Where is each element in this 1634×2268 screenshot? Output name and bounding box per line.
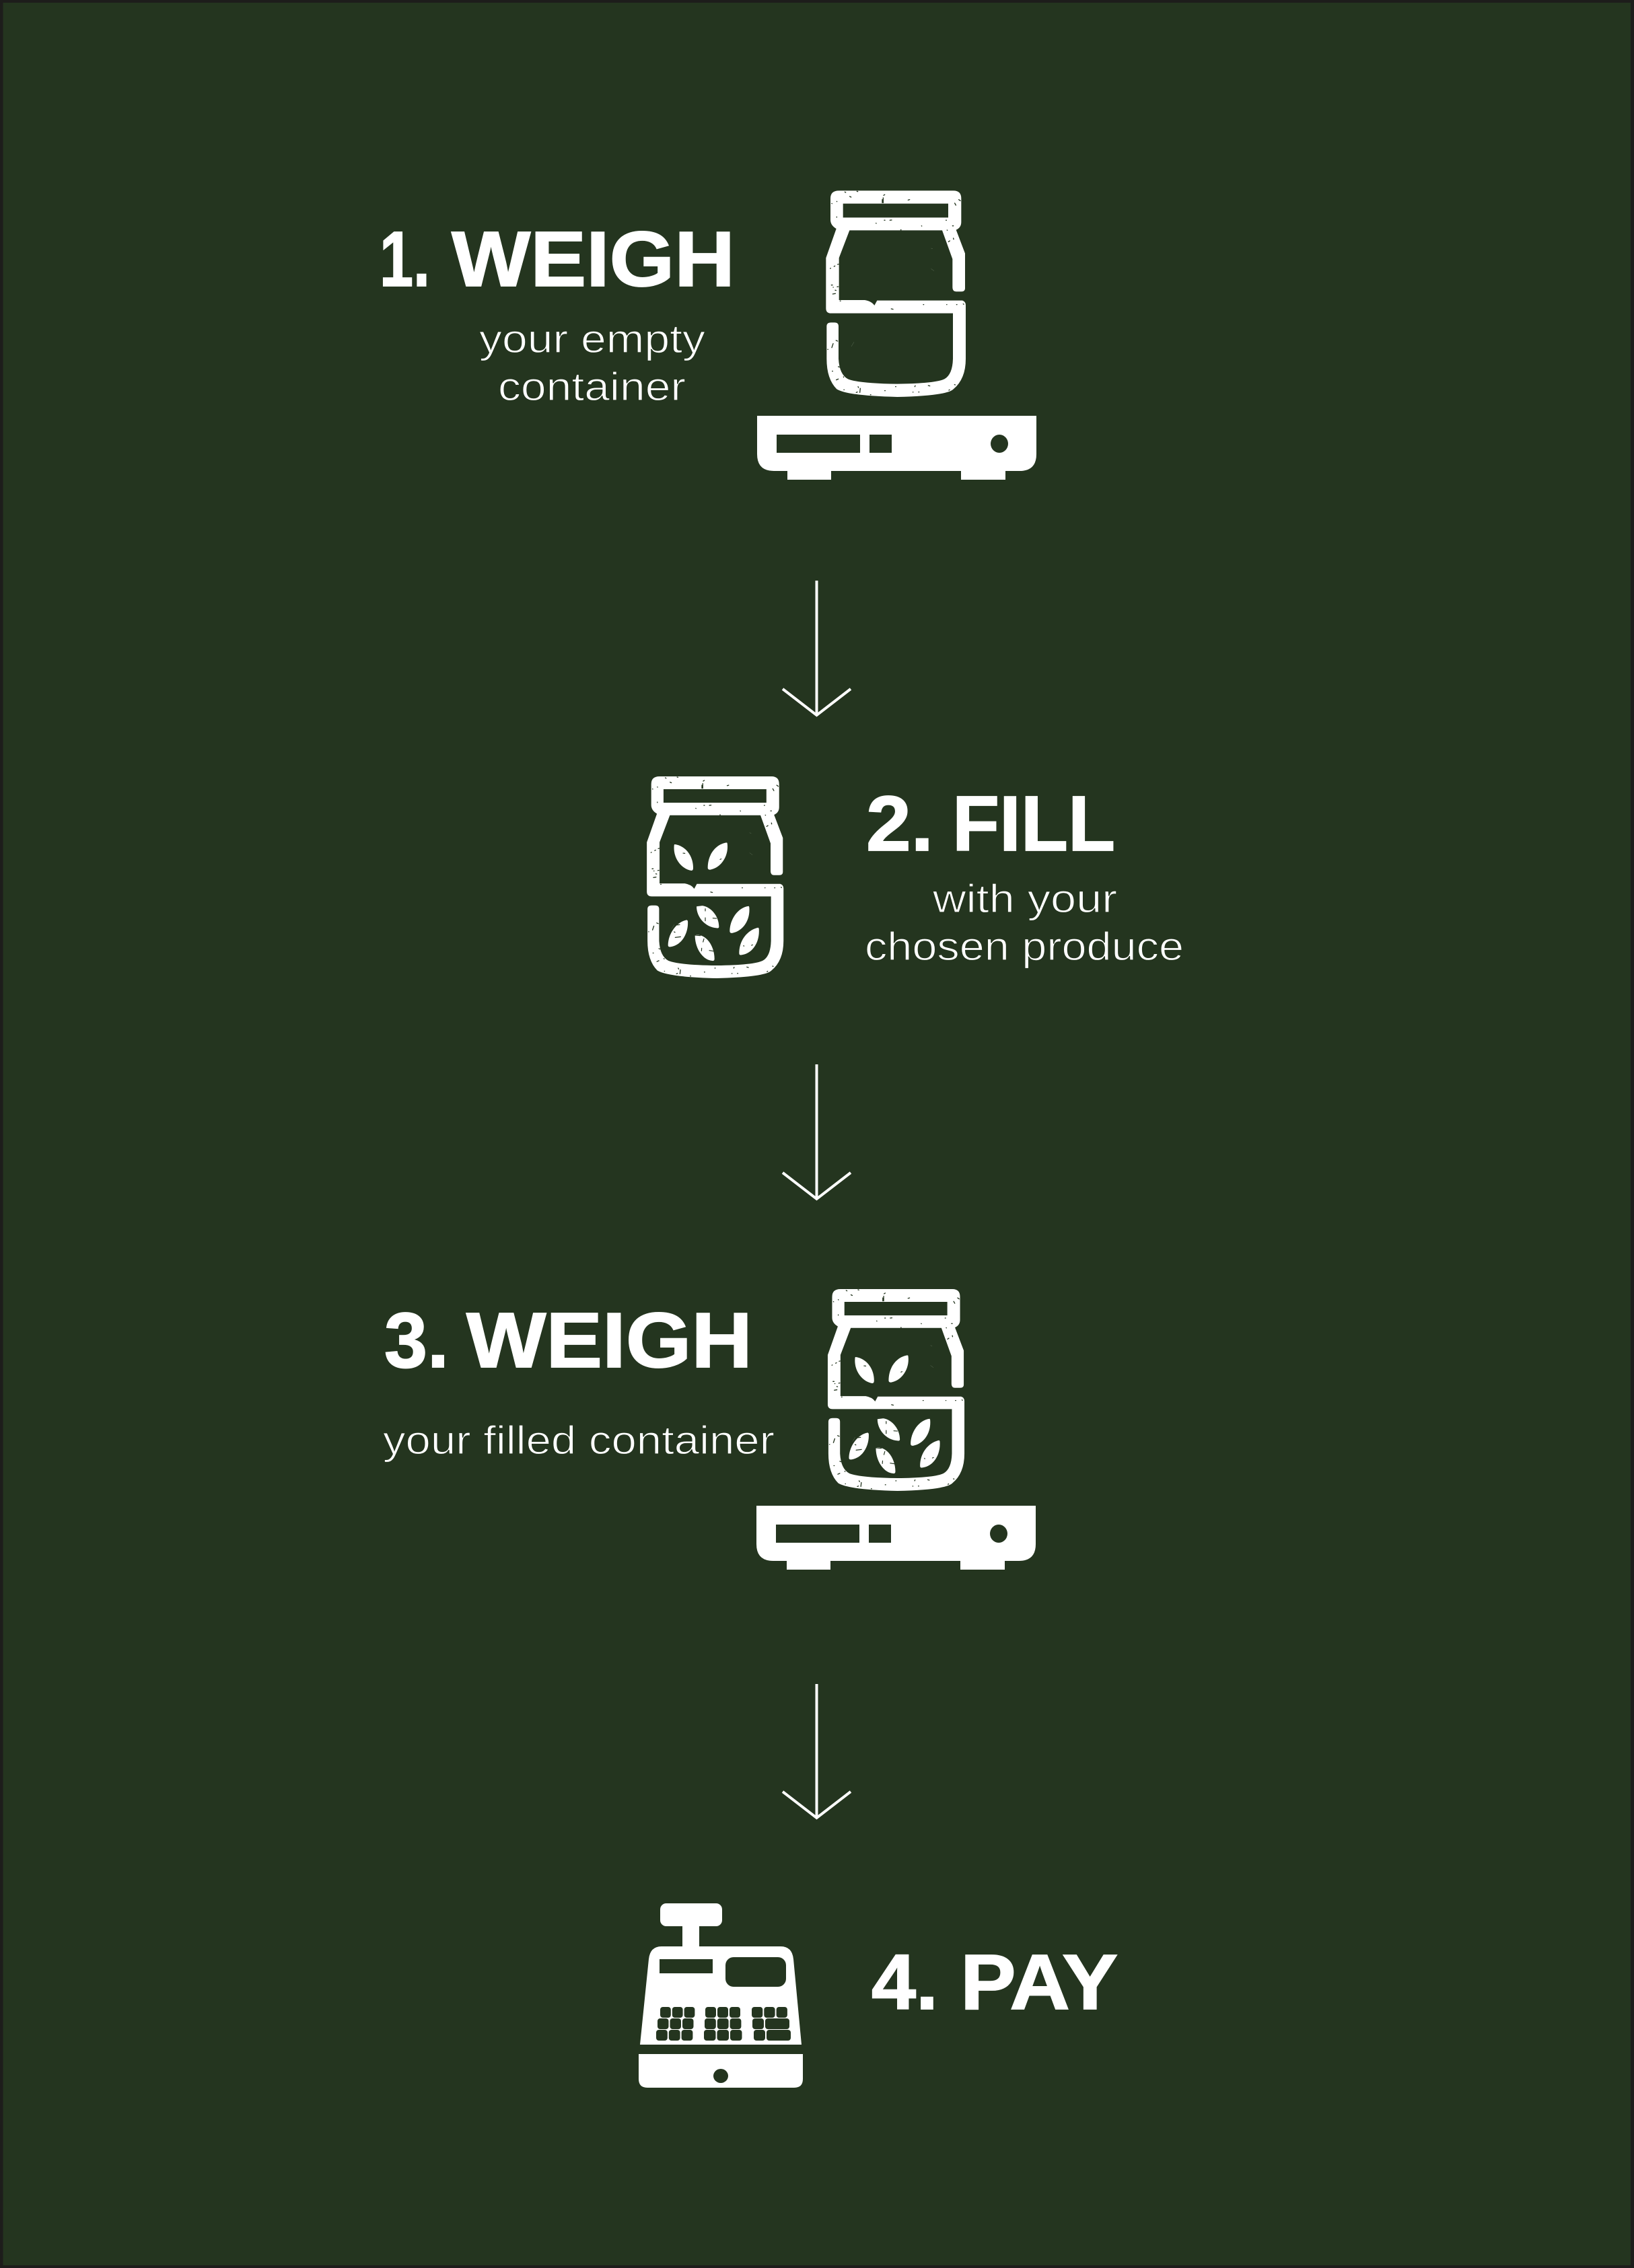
- heading: 4. PAY: 4.: [872, 1938, 938, 2026]
- text: your empty container: your empty: [479, 317, 706, 361]
- icon: filled jar on scale: [828, 1289, 964, 1491]
- heading: 1. WEIGH: 1.: [380, 215, 430, 303]
- register windows: [660, 1957, 786, 1987]
- step 3: weigh filled container: [383, 1289, 1036, 1570]
- text: with your chosen produce: [865, 877, 1184, 969]
- heading: 4. PAY: PAY: [960, 1938, 1118, 2026]
- arrow 3: [783, 1684, 851, 1818]
- text: with your chosen produce: chosen produce: [865, 924, 1184, 969]
- register drawer: [639, 2054, 803, 2088]
- register keys: [656, 2007, 791, 2041]
- icon: cash register: [639, 1903, 803, 2088]
- step 2: fill: [647, 776, 1184, 978]
- heading: 4. PAY: [872, 1938, 1118, 2026]
- heading: 1. WEIGH: WEIGH: [452, 215, 735, 303]
- register body: [640, 1946, 802, 2045]
- heading: 2. FILL: FILL: [952, 780, 1115, 867]
- arrow 2: [783, 1064, 851, 1199]
- text: with your chosen produce: with your: [932, 877, 1117, 921]
- heading: 3. WEIGH: WEIGH: [466, 1296, 752, 1384]
- icon: scale: [757, 416, 1036, 480]
- heading: 2. FILL: 2.: [866, 780, 933, 867]
- icon: scale: [756, 1506, 1036, 1570]
- heading: 3. WEIGH: 3.: [384, 1296, 449, 1384]
- text: your filled container: your filled container: [383, 1418, 775, 1463]
- text: your empty container: [479, 317, 706, 409]
- register display: [660, 1903, 722, 1926]
- register stem: [682, 1924, 699, 1948]
- icon: filled jar: [647, 776, 783, 978]
- step 1: weigh empty container: [380, 190, 1036, 480]
- text: your empty container: container: [498, 365, 686, 409]
- arrow 1: [783, 581, 851, 716]
- icon: empty jar: [826, 190, 966, 397]
- step 4: pay: [639, 1903, 1118, 2088]
- heading: 2. FILL: [866, 780, 1115, 867]
